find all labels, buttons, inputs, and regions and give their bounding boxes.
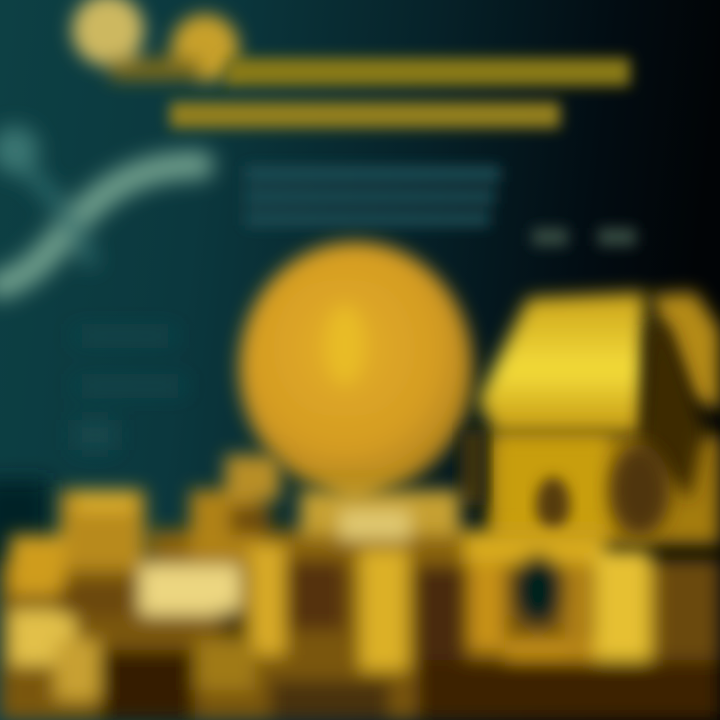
swoosh: pale green line: [0, 126, 200, 285]
title band: [170, 58, 630, 128]
dark lower left corner shading: [0, 480, 50, 570]
house wall bright: [495, 435, 610, 535]
text block: left column lines: [75, 330, 185, 450]
house window: [610, 444, 670, 536]
text block: small right label: [532, 228, 636, 246]
house edge shadow: [460, 430, 486, 505]
house right roof: [650, 292, 720, 410]
icon: top coins: [72, 0, 239, 82]
icon: large gold coin: [239, 242, 473, 510]
house wall: [490, 435, 720, 545]
text block: subtitle lines: [245, 166, 500, 226]
gold bars: bottom pile: [0, 455, 720, 720]
house door: [536, 477, 570, 533]
house dark gable: [640, 325, 705, 500]
icon: golden house: [460, 292, 720, 545]
house roof: [478, 292, 645, 435]
